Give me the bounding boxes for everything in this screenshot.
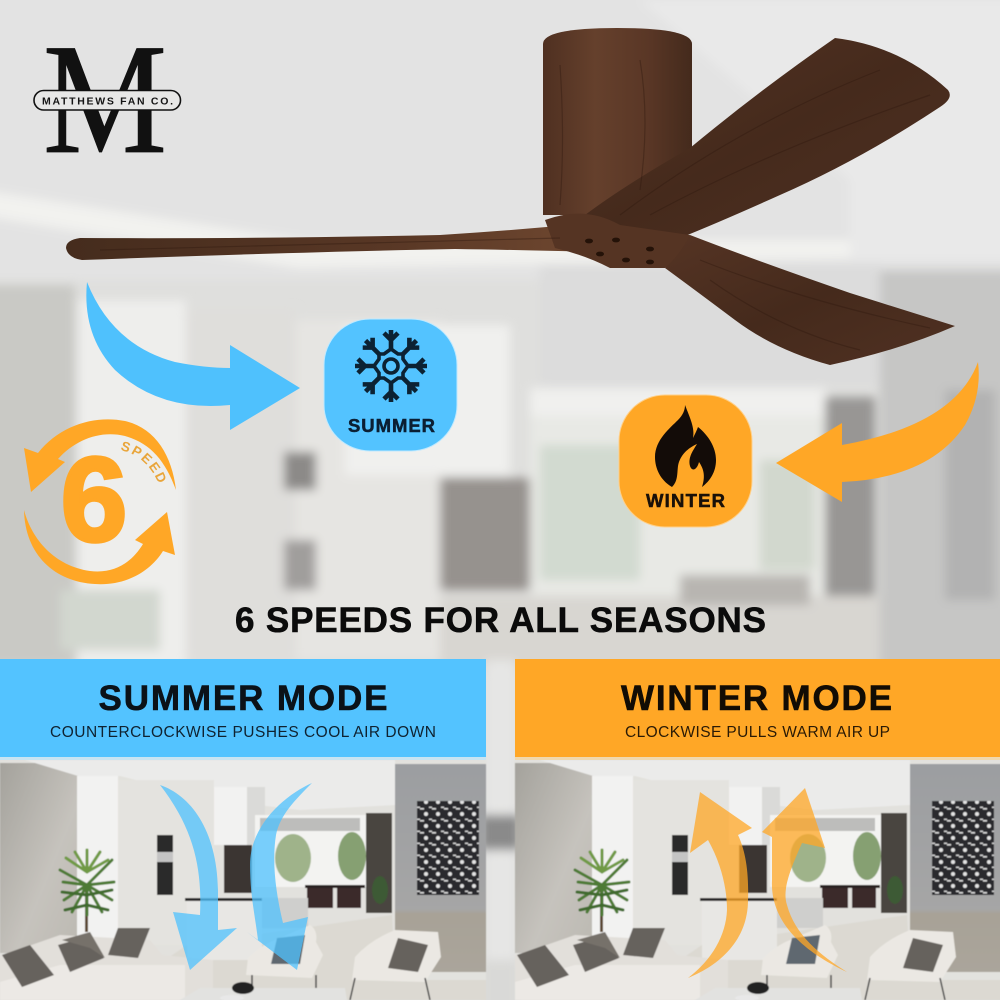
fan hub screws (585, 238, 654, 264)
winter header (515, 659, 1000, 757)
summer room photo (0, 760, 486, 1000)
badge: winter: WINTER (646, 490, 725, 511)
panel: summer mode (0, 659, 486, 1000)
summer room arrows (160, 783, 312, 970)
logo: Matthews Fan Co.: M (43, 12, 167, 187)
logo name pill (34, 90, 180, 110)
speed count: 6 (61, 433, 127, 567)
logo name pill: MATTHEWS FAN CO. (42, 96, 173, 108)
winter header: WINTER MODE (621, 679, 892, 718)
fan blade: upper right (585, 38, 950, 238)
badge: winter (619, 395, 752, 527)
winter room photo (515, 760, 1000, 1000)
summer header (0, 659, 486, 757)
fan blade: lower right (665, 235, 955, 365)
arrow: summer airflow (86, 282, 300, 430)
heading: 6 SPEEDS FOR ALL SEASONS (235, 601, 766, 640)
fan centre hub (545, 214, 690, 268)
speed label: SPEED (121, 442, 166, 482)
top rotation arrow (24, 419, 176, 492)
badge: summer (324, 319, 457, 451)
winter room arrows (688, 788, 847, 978)
fan motor housing (543, 28, 692, 215)
panel: winter mode (515, 659, 1000, 1000)
arrow: winter airflow (776, 362, 979, 502)
icon: snowflake (355, 330, 427, 402)
ceiling fan (66, 28, 955, 365)
icon: flame (655, 405, 716, 487)
summer header: SUMMER MODE (98, 679, 388, 718)
fan blade: left (66, 222, 600, 260)
summer header: COUNTERCLOCKWISE PUSHES COOL AIR DOWN (50, 724, 436, 741)
icon: 6 speed dial (24, 419, 176, 584)
wood grain (100, 60, 930, 350)
winter header: CLOCKWISE PULLS WARM AIR UP (625, 724, 890, 741)
badge: summer: SUMMER (348, 415, 435, 436)
bottom rotation arrow (24, 510, 175, 584)
